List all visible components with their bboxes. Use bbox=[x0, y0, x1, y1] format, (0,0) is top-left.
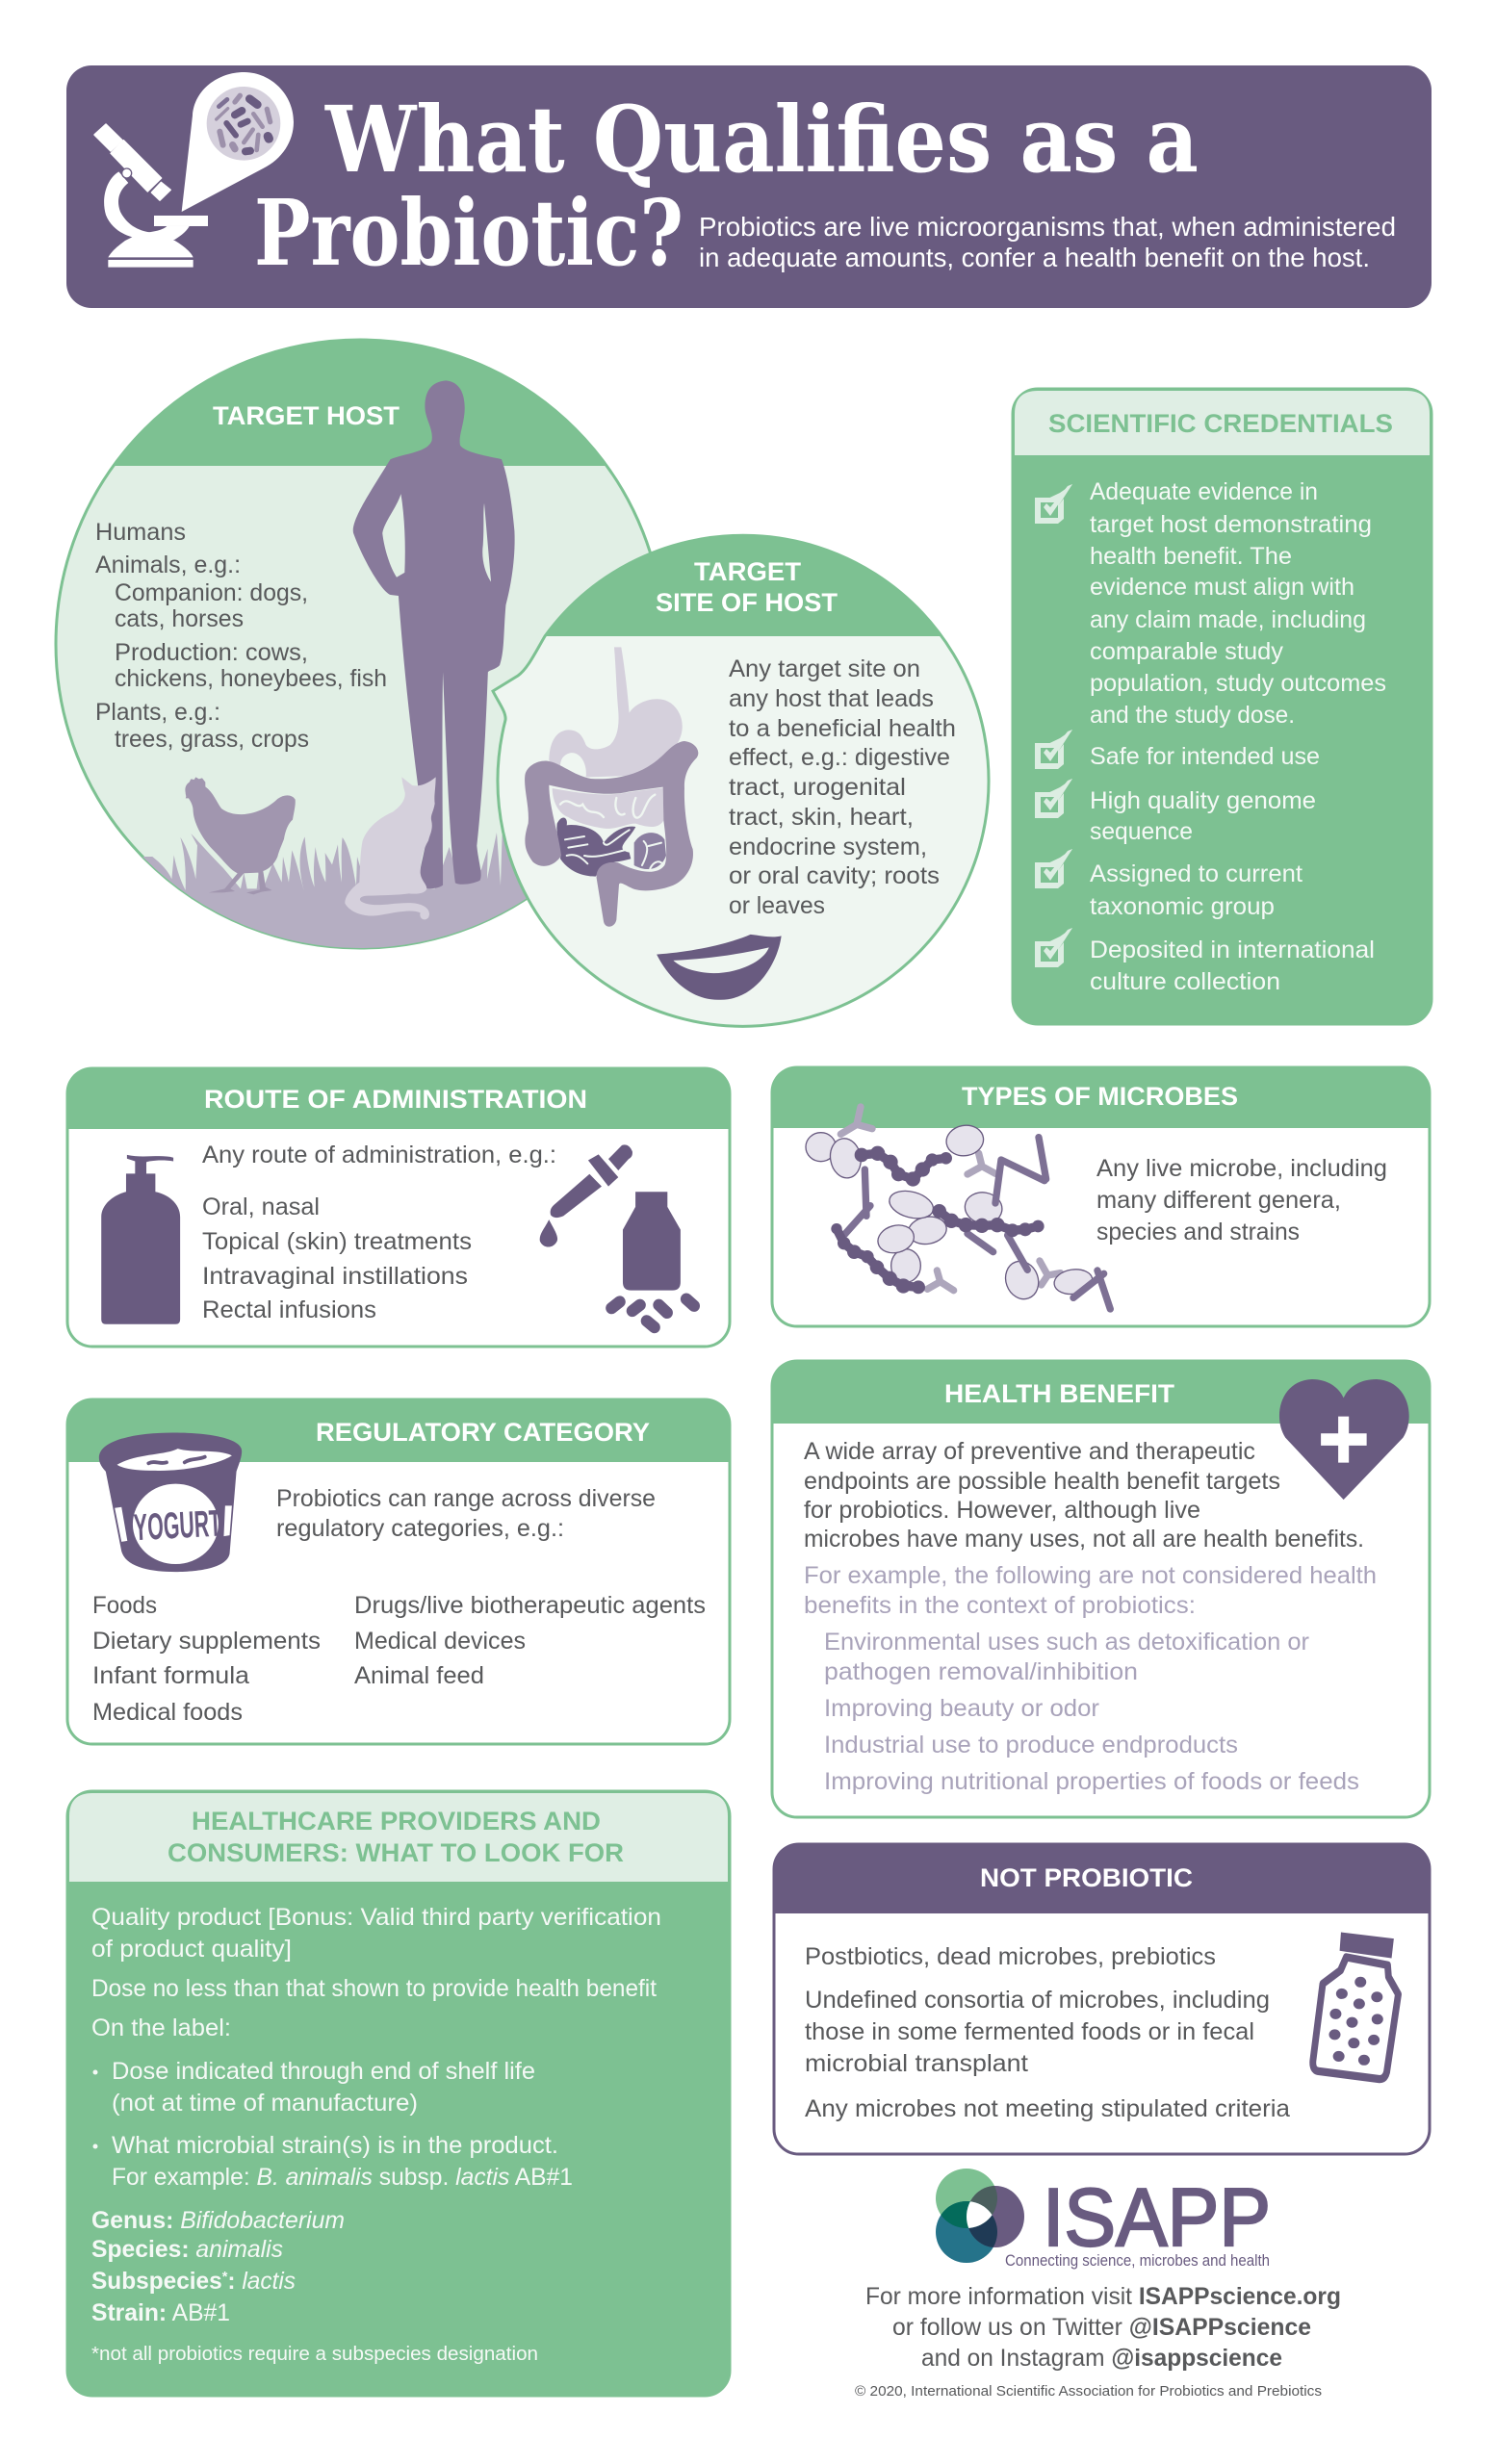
not probiotic text: microbial transplant bbox=[805, 2050, 1028, 2077]
target host header band bbox=[116, 341, 605, 466]
not probiotic text: Undefined consortia of microbes, including bbox=[805, 1987, 1270, 2014]
taxonomy example: Strain: AB#1 bbox=[91, 2299, 230, 2326]
quality and dose text: of product quality] bbox=[91, 1936, 292, 1963]
not probiotic text bbox=[805, 1943, 1290, 2122]
icon: chicken bbox=[185, 777, 296, 894]
taxonomy example: * bbox=[222, 2269, 228, 2285]
regulatory header band bbox=[67, 1399, 730, 1462]
icon: pill jar bbox=[1313, 1933, 1398, 2079]
title: What Qualifies as a bbox=[324, 87, 1199, 193]
definition text: in adequate amounts, confer a health benefit on the host. bbox=[699, 243, 1370, 272]
panel: not probiotic bbox=[774, 1844, 1430, 2154]
non-benefit examples: Industrial use to produce endproducts bbox=[824, 1732, 1238, 1758]
non-benefit examples: Improving beauty or odor bbox=[824, 1695, 1099, 1722]
heading: not probiotic: NOT PROBIOTIC bbox=[980, 1863, 1193, 1892]
non-benefit examples: Environmental uses such as detoxification or bbox=[824, 1629, 1309, 1656]
not probiotic text: those in some fermented foods or in fecal bbox=[805, 2018, 1254, 2045]
target site text: Any target site on bbox=[729, 655, 920, 682]
heading: target host: TARGET HOST bbox=[213, 401, 400, 430]
heading: what to look for: CONSUMERS: WHAT TO LOOK FOR bbox=[168, 1838, 624, 1867]
target site text: tract, skin, heart, bbox=[729, 804, 914, 831]
not probiotic text: Postbiotics, dead microbes, prebiotics bbox=[805, 1943, 1216, 1970]
copyright: © 2020, International Scientific Association for Probiotics and Prebiotics bbox=[855, 2383, 1322, 2400]
credentials list: target host demonstrating bbox=[1090, 511, 1372, 538]
health benefit header band bbox=[772, 1361, 1430, 1424]
host list: chickens, honeybees, fish bbox=[115, 665, 387, 692]
label bullets: For example: B. animalis subsp. lactis AB#1 bbox=[112, 2164, 573, 2191]
target site text bbox=[729, 655, 956, 919]
route header band bbox=[67, 1068, 730, 1129]
quality and dose text: Dose no less than that shown to provide health benefit bbox=[91, 1975, 657, 2002]
icon: pump bottle bbox=[101, 1155, 180, 1324]
host list: trees, grass, crops bbox=[115, 726, 309, 753]
credentials list: taxonomic group bbox=[1090, 893, 1275, 920]
panel: target host circle bbox=[48, 337, 684, 960]
credentials list: Safe for intended use bbox=[1090, 743, 1320, 770]
credentials list: health benefit. The bbox=[1090, 543, 1292, 570]
icon: lips bbox=[657, 935, 782, 1000]
regulatory list: left column: Medical foods bbox=[92, 1699, 243, 1726]
panel: target site of host circle bbox=[491, 529, 1001, 1026]
health benefit text bbox=[804, 1438, 1364, 1553]
icon: dropper and vial with pills bbox=[540, 1144, 694, 1327]
credentials list: Assigned to current bbox=[1090, 860, 1303, 887]
taxonomy example: Genus: Bifidobacterium bbox=[91, 2207, 345, 2234]
heading: target site of host: SITE OF HOST bbox=[656, 588, 838, 617]
host list bbox=[95, 519, 387, 753]
target site text: effect, e.g.: digestive bbox=[729, 744, 950, 771]
icon: human silhouette bbox=[353, 380, 515, 888]
taxonomy example: lactis bbox=[242, 2268, 296, 2295]
non-benefit examples bbox=[804, 1562, 1377, 1795]
heading: what to look for: HEALTHCARE PROVIDERS AND bbox=[192, 1807, 601, 1835]
credentials list: and the study dose. bbox=[1090, 702, 1295, 729]
contact information: and on Instagram @isappscience bbox=[921, 2345, 1282, 2372]
host list: Plants, e.g.: bbox=[95, 699, 220, 726]
route text: Intravaginal instillations bbox=[202, 1263, 468, 1290]
heading: regulatory category: REGULATORY CATEGORY bbox=[316, 1418, 650, 1447]
host list: Production: cows, bbox=[115, 639, 308, 666]
icon: microscope with magnified microbes bbox=[94, 72, 294, 268]
credentials list: culture collection bbox=[1090, 968, 1280, 995]
route text: Any route of administration, e.g.: bbox=[202, 1142, 556, 1168]
panel: types of microbes bbox=[772, 1067, 1430, 1326]
icon: heart with plus bbox=[1279, 1379, 1409, 1500]
credentials list: Adequate evidence in bbox=[1090, 478, 1318, 505]
credentials list: Deposited in international bbox=[1090, 937, 1375, 963]
host list: Companion: dogs, bbox=[115, 579, 308, 606]
credentials header band bbox=[1015, 391, 1430, 455]
healthcare header band bbox=[69, 1793, 728, 1882]
panel: scientific credentials bbox=[1013, 389, 1432, 1024]
health benefit text: for probiotics. However, although live bbox=[804, 1497, 1200, 1524]
illustration: microbes bbox=[806, 1107, 1110, 1309]
regulatory intro text: regulatory categories, e.g.: bbox=[276, 1515, 564, 1542]
label bullets bbox=[92, 2058, 573, 2191]
quality and dose text: On the label: bbox=[91, 2015, 231, 2041]
logo: ISAPP bbox=[936, 2169, 1271, 2270]
panel: healthcare providers and consumers bbox=[67, 1791, 730, 2396]
credentials list: sequence bbox=[1090, 818, 1193, 845]
label bullets: What microbial strain(s) is in the product. bbox=[112, 2132, 558, 2159]
checklist icons bbox=[1035, 484, 1072, 967]
host list: Animals, e.g.: bbox=[95, 552, 241, 578]
route text: Topical (skin) treatments bbox=[202, 1228, 472, 1255]
taxonomy example: : bbox=[227, 2268, 236, 2295]
quality and dose text: Quality product [Bonus: Valid third party verification bbox=[91, 1904, 661, 1931]
logo mark: overlapping circles bbox=[936, 2169, 1024, 2263]
taxonomy example bbox=[91, 2207, 345, 2326]
target site text: to a beneficial health bbox=[729, 715, 956, 742]
label bullets: (not at time of manufacture) bbox=[112, 2090, 418, 2117]
quality and dose text bbox=[91, 1904, 661, 2041]
target site text: or oral cavity; roots bbox=[729, 862, 940, 889]
credentials list: comparable study bbox=[1090, 638, 1284, 665]
not probiotic header band bbox=[774, 1844, 1430, 1913]
health benefit text: A wide array of preventive and therapeutic bbox=[804, 1438, 1255, 1465]
host list: Humans bbox=[95, 519, 186, 546]
credentials list: evidence must align with bbox=[1090, 574, 1354, 601]
icon: yogurt cup bbox=[99, 1433, 242, 1572]
logo wordmark: ISAPP bbox=[1043, 2172, 1271, 2264]
title: Probiotic? bbox=[254, 180, 684, 287]
route text: Rectal infusions bbox=[202, 1296, 376, 1323]
heading: target site of host bbox=[656, 557, 838, 617]
definition text: Probiotics are live microorganisms that, when administered bbox=[699, 212, 1396, 242]
icon: yogurt cup: YOGURT bbox=[133, 1502, 223, 1549]
route text bbox=[202, 1142, 556, 1323]
taxonomy example: Species: animalis bbox=[91, 2236, 283, 2263]
non-benefit examples: pathogen removal/inhibition bbox=[824, 1658, 1138, 1685]
regulatory intro text bbox=[276, 1485, 656, 1542]
regulatory intro text: Probiotics can range across diverse bbox=[276, 1485, 656, 1512]
health benefit text: endpoints are possible health benefit targets bbox=[804, 1468, 1280, 1495]
regulatory list: right column: Medical devices bbox=[354, 1628, 526, 1655]
panel: regulatory category bbox=[67, 1399, 730, 1744]
heading: scientific credentials: SCIENTIFIC CREDENTIALS bbox=[1048, 409, 1393, 438]
regulatory list: right column: Animal feed bbox=[354, 1662, 484, 1689]
credentials list bbox=[1090, 478, 1386, 995]
taxonomy example: Subspecies bbox=[91, 2268, 222, 2295]
panel: route of administration bbox=[67, 1068, 730, 1347]
target site text: tract, urogenital bbox=[729, 774, 906, 801]
regulatory list: right column bbox=[354, 1592, 706, 1689]
microbes text: many different genera, bbox=[1096, 1187, 1341, 1214]
contact information: For more information visit ISAPPscience.org bbox=[865, 2283, 1341, 2310]
health benefit text: microbes have many uses, not all are health benefits. bbox=[804, 1526, 1364, 1553]
non-benefit examples: benefits in the context of probiotics: bbox=[804, 1592, 1196, 1619]
icon: cat bbox=[345, 777, 436, 919]
panel: health benefit bbox=[772, 1361, 1430, 1817]
credentials list: population, study outcomes bbox=[1090, 670, 1386, 697]
host list: cats, horses bbox=[115, 605, 244, 632]
heading: health benefit: HEALTH BENEFIT bbox=[944, 1379, 1175, 1408]
credentials list: any claim made, including bbox=[1090, 606, 1366, 633]
target site text: endocrine system, bbox=[729, 834, 927, 860]
heading: target site of host: TARGET bbox=[694, 557, 802, 586]
microbes text bbox=[1096, 1155, 1387, 1245]
microbes text: Any live microbe, including bbox=[1096, 1155, 1387, 1182]
non-benefit examples: For example, the following are not considered health bbox=[804, 1562, 1377, 1589]
route text: Oral, nasal bbox=[202, 1194, 320, 1220]
contact information bbox=[865, 2283, 1341, 2372]
label bullets: Dose indicated through end of shelf life bbox=[112, 2058, 535, 2085]
icon: digestive tract bbox=[525, 647, 698, 927]
target site text: any host that leads bbox=[729, 685, 934, 712]
title bbox=[254, 87, 1199, 287]
microbes header band bbox=[772, 1067, 1430, 1128]
heading: route of administration: ROUTE OF ADMINISTRATION bbox=[204, 1085, 587, 1114]
footnote: *not all probiotics require a subspecies designation bbox=[91, 2344, 538, 2365]
credentials list: High quality genome bbox=[1090, 787, 1316, 814]
regulatory list: left column: Infant formula bbox=[92, 1662, 249, 1689]
regulatory list: left column bbox=[92, 1592, 321, 1726]
contact information: or follow us on Twitter @ISAPPscience bbox=[892, 2314, 1311, 2341]
ground and grass bbox=[142, 833, 526, 948]
microbes text: species and strains bbox=[1096, 1219, 1300, 1245]
not probiotic text: Any microbes not meeting stipulated criteria bbox=[805, 2095, 1290, 2122]
regulatory list: left column: Foods bbox=[92, 1592, 157, 1619]
header banner bbox=[66, 65, 1432, 308]
logo tagline: Connecting science, microbes and health bbox=[1005, 2251, 1270, 2270]
heading: types of microbes: TYPES OF MICROBES bbox=[962, 1082, 1238, 1111]
target site text: or leaves bbox=[729, 892, 825, 919]
regulatory list: left column: Dietary supplements bbox=[92, 1628, 321, 1655]
target site header band bbox=[547, 537, 940, 636]
definition text bbox=[699, 212, 1396, 272]
non-benefit examples: Improving nutritional properties of foods or feeds bbox=[824, 1768, 1359, 1795]
regulatory list: right column: Drugs/live biotherapeutic agents bbox=[354, 1592, 706, 1619]
heading: what to look for bbox=[168, 1807, 624, 1867]
